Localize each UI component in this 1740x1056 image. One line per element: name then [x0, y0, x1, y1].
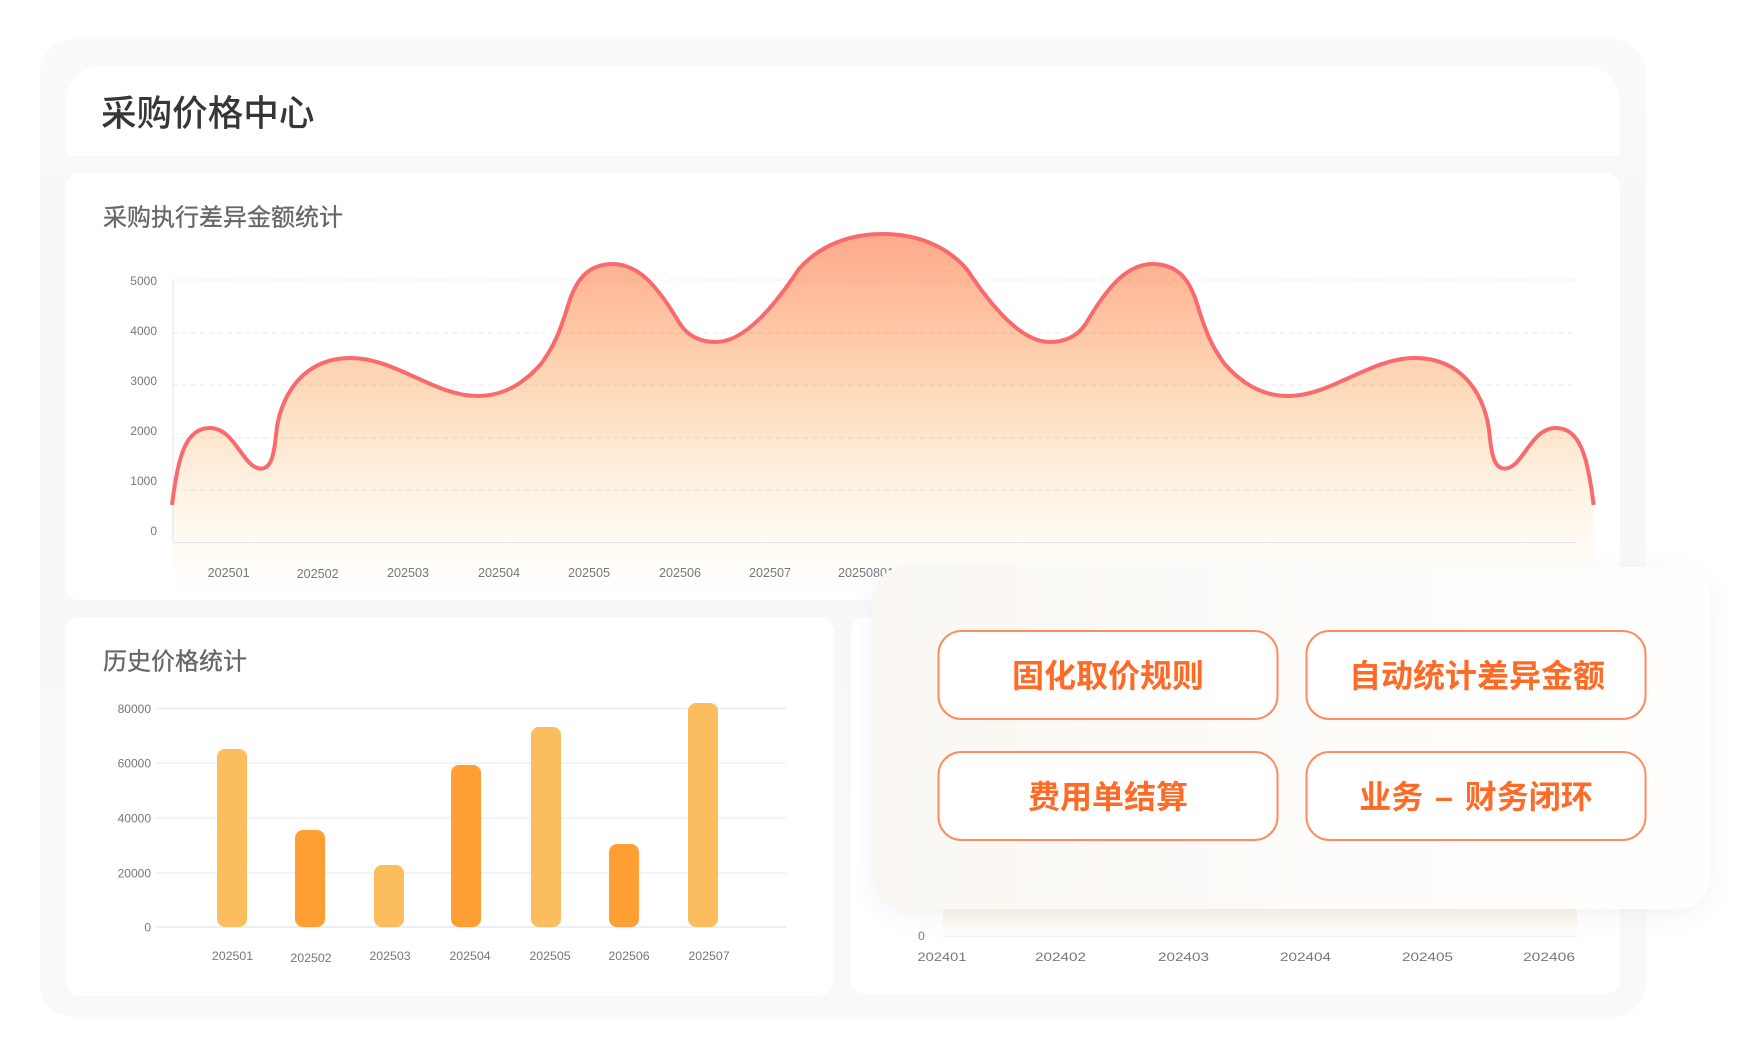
area chart	[172, 234, 1594, 600]
zero label: 0	[918, 929, 925, 943]
y axis labels: 1000	[130, 474, 157, 488]
y axis labels: 0	[144, 920, 151, 934]
x axis labels	[208, 566, 894, 581]
x axis labels: 202503	[387, 566, 429, 580]
chart area band	[943, 905, 1577, 936]
x axis labels: 202506	[608, 949, 650, 963]
x axis labels: 202401	[918, 950, 967, 964]
button: business finance loop	[1306, 752, 1646, 840]
panel: floating feature card	[873, 567, 1710, 909]
x axis labels: 202406	[1523, 950, 1575, 964]
button: expense settlement	[938, 752, 1278, 840]
x axis labels	[212, 949, 730, 965]
x axis labels: 202503	[369, 949, 411, 963]
button: business finance loop: 业务 – 财务闭环	[1359, 779, 1593, 815]
x axis labels: 202506	[659, 566, 701, 580]
x axis labels: 202501	[212, 949, 253, 963]
x axis labels	[918, 950, 1575, 964]
x axis labels: 202403	[1158, 950, 1209, 964]
y axis labels: 2000	[130, 424, 157, 438]
x axis labels: 202405	[1402, 950, 1453, 964]
x axis labels: 202501	[208, 566, 250, 580]
x axis labels: 202404	[1280, 950, 1331, 964]
x axis labels: 202504	[449, 949, 491, 963]
button: fixed pricing rules	[938, 631, 1278, 719]
panel: historical price bar chart	[65, 617, 834, 996]
y axis labels: 5000	[130, 274, 157, 288]
button: automatic variance statistics: 自动统计差异金额	[1349, 658, 1605, 694]
y axis labels: 3000	[130, 374, 157, 388]
panel: purchase execution variance chart	[65, 173, 1620, 600]
y axis labels: 60000	[118, 756, 151, 770]
heading: historical price: 历史价格统计	[103, 648, 247, 676]
y axis labels: 4000	[130, 324, 157, 338]
button: automatic variance statistics	[1306, 631, 1646, 719]
y axis labels	[130, 274, 157, 538]
x axis labels: 202507	[749, 566, 791, 580]
x axis labels: 202505	[568, 566, 610, 580]
x axis labels: 202507	[688, 949, 730, 963]
bars	[217, 703, 718, 927]
y axis labels: 80000	[118, 702, 151, 716]
x axis labels: 202402	[1035, 950, 1086, 964]
x axis labels: 202502	[290, 951, 332, 965]
panel: page header	[66, 66, 1620, 156]
x axis labels: 202504	[478, 566, 520, 580]
x axis labels: 202505	[529, 949, 571, 963]
button: expense settlement: 费用单结算	[1028, 779, 1188, 815]
y axis labels: 40000	[118, 812, 151, 826]
x axis labels: 20250801	[838, 566, 894, 580]
y axis labels	[118, 702, 151, 934]
panel: partially hidden trend chart	[851, 617, 1620, 994]
button: fixed pricing rules: 固化取价规则	[1012, 658, 1204, 694]
y axis labels: 0	[150, 524, 157, 538]
x axis labels: 202502	[297, 567, 339, 581]
y axis labels: 20000	[118, 866, 151, 880]
heading: variance chart: 采购执行差异金额统计	[103, 204, 343, 232]
title: 采购价格中心	[101, 94, 314, 134]
